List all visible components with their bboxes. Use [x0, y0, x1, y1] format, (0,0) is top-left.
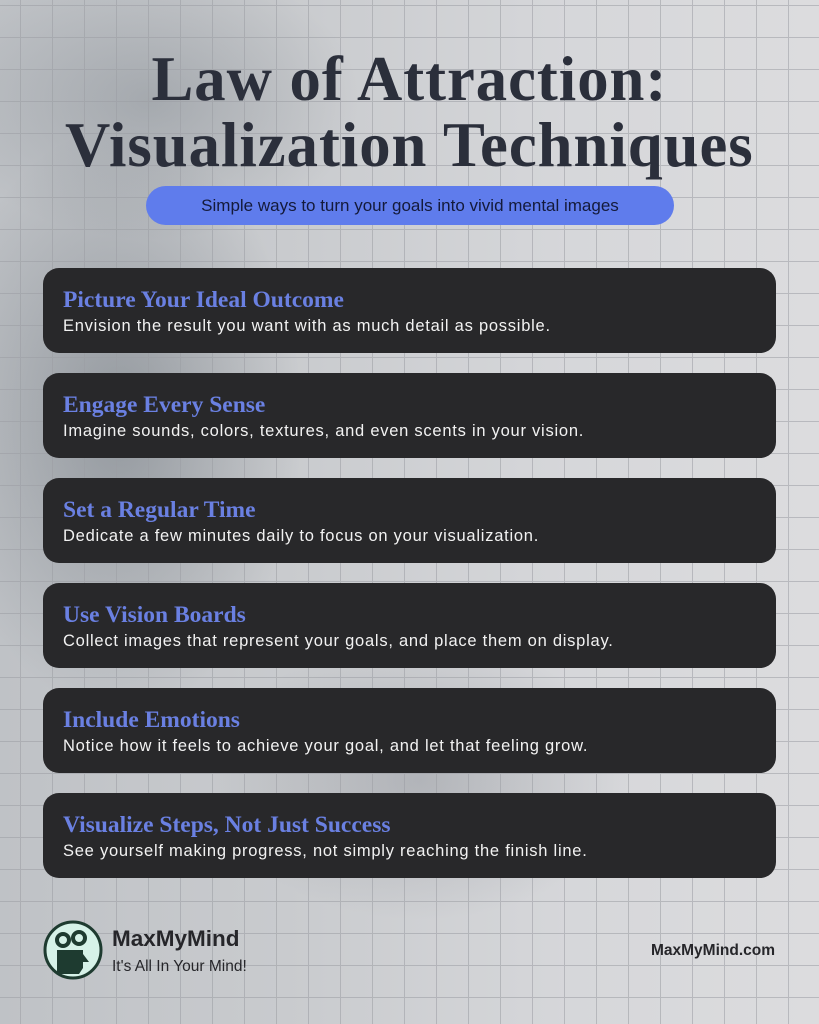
- brand name: MaxMyMind: [112, 926, 240, 951]
- icon: logo: [44, 920, 102, 980]
- card: picture ideal outcome: Envision the result you want with as much detail as possible.: [63, 317, 551, 335]
- subtitle pill: [146, 186, 674, 225]
- card: steps: Visualize Steps, Not Just Success: [63, 812, 390, 838]
- card: vision boards: Collect images that represent your goals, and place them on display.: [63, 632, 614, 650]
- tagline: It's All In Your Mind!: [112, 958, 247, 975]
- card: vision boards: Use Vision Boards: [63, 602, 246, 628]
- card: emotions: [43, 688, 776, 773]
- card: picture ideal outcome: Picture Your Ideal Outcome: [63, 287, 344, 313]
- card: steps: [43, 793, 776, 878]
- website: MaxMyMind.com: [651, 942, 775, 959]
- card: engage every sense: [43, 373, 776, 458]
- card: vision boards: [43, 583, 776, 668]
- card: steps: See yourself making progress, not simply reaching the finish line.: [63, 842, 588, 860]
- card: emotions: Notice how it feels to achieve your goal, and let that feeling grow.: [63, 737, 588, 755]
- card: picture ideal outcome: [43, 268, 776, 353]
- card: engage every sense: Imagine sounds, colors, textures, and even scents in your vision.: [63, 422, 584, 440]
- card: emotions: Include Emotions: [63, 707, 240, 733]
- card: engage every sense: Engage Every Sense: [63, 392, 265, 418]
- card: regular time: Dedicate a few minutes daily to focus on your visualization.: [63, 527, 539, 545]
- title: Visualization Techniques: [65, 109, 754, 180]
- card: regular time: [43, 478, 776, 563]
- card: regular time: Set a Regular Time: [63, 497, 256, 523]
- title: Law of Attraction:: [152, 43, 667, 114]
- subtitle pill: Simple ways to turn your goals into vivid mental images: [201, 196, 619, 215]
- title: [65, 43, 754, 180]
